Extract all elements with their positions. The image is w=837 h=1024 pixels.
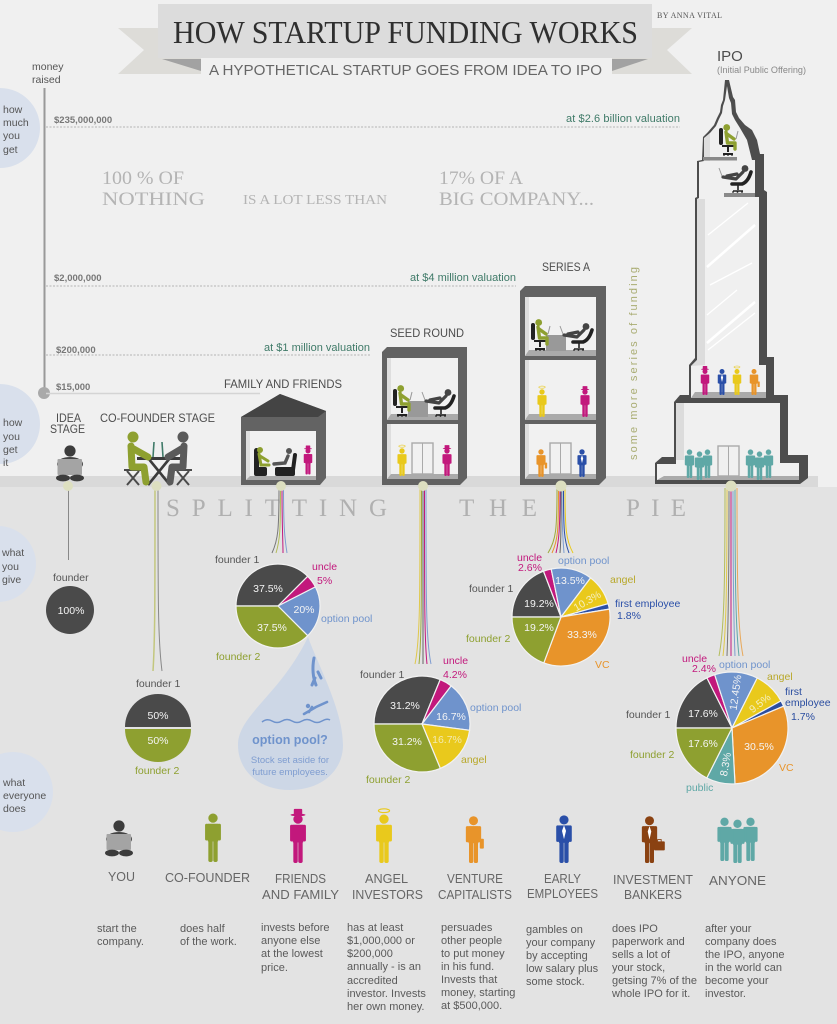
pie: IPO: 2.4% xyxy=(692,663,716,675)
pie: seed round: 16.7% xyxy=(432,734,462,746)
pie: seed round xyxy=(360,655,521,786)
pie: idea stage: founder xyxy=(53,572,89,584)
column: you xyxy=(97,820,144,948)
stage label: seed round: SEED ROUND xyxy=(390,326,464,340)
side bubble: what everyone does xyxy=(0,752,53,832)
column: angel investors: INVESTORS xyxy=(352,887,423,902)
column: early employees: by accepting xyxy=(526,950,588,962)
column: early employees: EMPLOYEES xyxy=(527,886,598,901)
pie: co-founder stage: founder 1 xyxy=(136,678,181,690)
stage label: idea: IDEA xyxy=(56,411,81,425)
pie: IPO: founder 1 xyxy=(626,709,671,721)
pie: IPO: 9.5% xyxy=(747,692,773,716)
column: investment bankers: your stock, xyxy=(612,962,665,974)
pie: series A: angel xyxy=(610,574,636,586)
pie: co-founder stage xyxy=(125,678,191,777)
column: angel investors: $200,000 xyxy=(347,948,393,960)
callout: option pool drop: option pool? xyxy=(252,733,328,747)
pie: IPO: 30.5% xyxy=(744,741,774,753)
column: investment bankers: getsing 7% of the xyxy=(612,975,697,987)
heading: splitting the pie xyxy=(166,495,686,522)
building: seed round xyxy=(382,347,467,485)
column: friends and family: invests before xyxy=(261,922,329,934)
funding level: 2 million: $2,000,000 xyxy=(54,273,102,284)
title: HOW STARTUP FUNDING WORKS xyxy=(173,14,638,50)
stage label: IPO: IPO xyxy=(717,48,743,65)
funding level: 2 million: at $4 million valuation xyxy=(410,272,516,284)
pie: series A: 2.6% xyxy=(518,562,542,574)
connector: idea to founder xyxy=(63,481,73,560)
column: venture capitalists xyxy=(438,816,515,1012)
title banner xyxy=(118,4,692,79)
pie: seed round: option pool xyxy=(470,702,521,714)
slogan text xyxy=(102,168,594,210)
heading: splitting the pie: PIE xyxy=(626,495,686,522)
column: you: company. xyxy=(97,936,144,948)
side bubble: how much you get: much xyxy=(3,117,29,129)
pie: IPO: uncle xyxy=(682,653,707,665)
funding level: 200 thousand: at $1 million valuation xyxy=(264,342,370,354)
connector: IPO xyxy=(719,480,743,656)
side bubble: how much you get: get xyxy=(3,144,18,156)
side bubble: how you get it: it xyxy=(3,457,8,469)
side bubble: what everyone does: what xyxy=(2,777,25,789)
icon: co-founders at table xyxy=(124,432,192,485)
pie: series A: 33.3% xyxy=(567,629,597,641)
callout: option pool drop: Stock set aside for xyxy=(251,755,329,766)
stage label: family and friends: FAMILY AND FRIENDS xyxy=(224,377,342,391)
pie: IPO: 17.6% xyxy=(688,738,718,750)
pie: family and friends: 37.5% xyxy=(253,583,283,595)
column: angel investors: investor. Invests xyxy=(347,988,426,1000)
pie: seed round: founder 1 xyxy=(360,669,405,681)
pie: seed round: uncle xyxy=(443,655,468,667)
column: angel investors xyxy=(347,809,426,1013)
stage label: IPO xyxy=(717,48,806,75)
building: series A xyxy=(520,286,606,485)
column: investment bankers: paperwork and xyxy=(612,936,685,948)
pie: co-founder stage: founder 2 xyxy=(135,765,180,777)
pie: IPO xyxy=(626,653,831,794)
side bubble: how you get it xyxy=(0,384,40,469)
column: venture capitalists: to put money xyxy=(441,948,505,960)
column: investment bankers: sells a lot of xyxy=(612,949,671,961)
pie: co-founder stage: 50% xyxy=(147,735,169,747)
column: early employees: EARLY xyxy=(544,871,581,886)
pie: family and friends: option pool xyxy=(321,613,372,625)
heading: splitting the pie: SPLITTING xyxy=(166,495,387,522)
side bubble: how much you get xyxy=(0,88,40,168)
column: early employees xyxy=(526,815,599,988)
side bubble: what you give: what xyxy=(1,547,24,559)
pie: series A: 13.5% xyxy=(555,575,585,587)
column: venture capitalists: VENTURE xyxy=(447,871,503,886)
pie: family and friends: 5% xyxy=(317,575,332,587)
background: lower panel xyxy=(0,487,837,1024)
pie: seed round: 16.7% xyxy=(436,711,466,723)
slogan text: 17% OF A xyxy=(439,168,523,189)
pie: IPO: 1.7% xyxy=(791,711,815,723)
pie: IPO: employee xyxy=(785,697,831,709)
callout: option pool drop xyxy=(238,637,343,790)
column: you: YOU xyxy=(108,869,135,884)
column: anyone xyxy=(705,818,784,1000)
column: investment bankers: does IPO xyxy=(612,923,658,935)
slogan text: 100 % OF xyxy=(102,168,184,189)
column: early employees: low salary plus xyxy=(526,963,599,975)
funding level: 235 million: at $2.6 billion valuation xyxy=(566,113,680,125)
pie: family and friends: uncle xyxy=(312,561,337,573)
column: friends and family: AND FAMILY xyxy=(262,887,339,902)
stage label: idea: STAGE xyxy=(50,422,85,436)
column: venture capitalists: money, starting xyxy=(441,987,515,999)
funding level: 200 thousand xyxy=(46,342,370,356)
pie: co-founder stage: 50% xyxy=(147,710,169,722)
column: co-founder: of the work. xyxy=(180,936,237,948)
side bubble: how much you get: you xyxy=(3,130,20,142)
column: venture capitalists: persuades xyxy=(441,922,493,934)
pie: series A: option pool xyxy=(558,555,609,567)
column: anyone: in the world can xyxy=(705,962,782,974)
side bubble: what you give xyxy=(0,526,36,602)
column: anyone: become your xyxy=(705,975,769,987)
side bubble: how you get it: get xyxy=(3,444,18,456)
funding level: 235 million: $235,000,000 xyxy=(54,115,112,126)
column: anyone: after your xyxy=(705,923,752,935)
pie: family and friends: 37.5% xyxy=(257,622,287,634)
column: angel investors: has at least xyxy=(347,922,403,934)
building: family house xyxy=(241,394,326,485)
pie: family and friends xyxy=(215,554,372,663)
funding level: 200 thousand: $200,000 xyxy=(56,345,96,356)
axis: money raised xyxy=(32,61,64,399)
byline: BY ANNA VITAL xyxy=(657,11,722,20)
pie: seed round: 31.2% xyxy=(390,700,420,712)
column: you: start the xyxy=(97,923,137,935)
pie: IPO: public xyxy=(686,782,713,794)
heading: splitting the pie: THE xyxy=(459,495,537,522)
column: co-founder xyxy=(165,813,250,948)
background: upper page xyxy=(0,0,837,488)
connector: seed round xyxy=(415,481,431,664)
pie: seed round: 31.2% xyxy=(392,736,422,748)
pie: IPO: 8.3% xyxy=(718,752,734,777)
column: friends and family: FRIENDS xyxy=(275,871,326,886)
column: venture capitalists: in his fund. xyxy=(441,961,494,973)
side bubble: what you give: give xyxy=(2,574,21,586)
stage label: IPO: (Initial Public Offering) xyxy=(717,65,806,75)
pie: IPO: 17.6% xyxy=(688,708,718,720)
pie: family and friends: 20% xyxy=(293,604,315,616)
column: venture capitalists: CAPITALISTS xyxy=(438,887,512,902)
stage label: co-founder: CO-FOUNDER STAGE xyxy=(100,411,215,425)
column: anyone: ANYONE xyxy=(709,873,766,888)
pie: family and friends: founder 2 xyxy=(216,651,261,663)
stage label: idea xyxy=(50,411,85,436)
pie: series A: 19.2% xyxy=(524,598,554,610)
pie: series A: uncle xyxy=(517,552,542,564)
column: friends and family: at the lowest xyxy=(261,948,323,960)
column: friends and family: price. xyxy=(261,962,288,974)
pie: IPO: 12.45% xyxy=(728,674,744,711)
connector: co-founder stage xyxy=(152,481,162,671)
column: angel investors: accredited xyxy=(347,975,398,987)
pie: series A: 10.3% xyxy=(572,589,603,614)
funding level: 2 million xyxy=(46,272,516,286)
column: investment bankers: INVESTMENT xyxy=(613,872,693,887)
slogan text: BIG COMPANY... xyxy=(439,189,594,210)
side bubble: how you get it: how xyxy=(3,417,23,429)
pie: IPO: angel xyxy=(767,671,793,683)
column: co-founder: does half xyxy=(180,923,226,935)
side bubble: how you get it: you xyxy=(3,431,20,443)
side bubble: what everyone does: everyone xyxy=(3,790,46,802)
slogan text: NOTHING xyxy=(102,189,205,210)
column: friends and family xyxy=(261,809,339,974)
column: investment bankers xyxy=(611,816,697,1000)
side bubble: how much you get: how xyxy=(3,104,23,116)
pie: series A: first employee xyxy=(615,598,681,610)
callout: option pool drop: future employees. xyxy=(252,767,328,778)
pie: series A: 1.8% xyxy=(617,610,641,622)
pie: seed round: angel xyxy=(461,754,487,766)
pie: series A xyxy=(466,552,681,671)
column: early employees: gambles on xyxy=(526,924,583,936)
vertical note: some more series of funding: some more series of funding xyxy=(628,267,640,460)
pie: IPO: VC xyxy=(779,762,794,774)
pie: IPO: founder 2 xyxy=(630,749,675,761)
pie: series A: 19.2% xyxy=(524,622,554,634)
column: anyone: company does xyxy=(705,936,777,948)
side bubble: what everyone does: does xyxy=(3,803,26,815)
pie: idea stage: 100% xyxy=(58,605,84,617)
pie: IPO: first xyxy=(785,686,802,698)
pie: series A: founder 1 xyxy=(469,583,514,595)
pie: seed round: founder 2 xyxy=(366,774,411,786)
subtitle: A HYPOTHETICAL STARTUP GOES FROM IDEA TO IPO xyxy=(209,62,602,79)
column: anyone: investor. xyxy=(705,988,746,1000)
connector: family and friends xyxy=(272,481,287,553)
pie: idea stage xyxy=(46,572,94,634)
pie: series A: founder 2 xyxy=(466,633,511,645)
connector: series A xyxy=(548,480,573,553)
column: early employees: your company xyxy=(526,937,596,949)
column: angel investors: ANGEL xyxy=(365,871,408,886)
slogan text: IS A LOT LESS THAN xyxy=(243,193,387,208)
column: friends and family: anyone else xyxy=(261,935,320,947)
pie: IPO: option pool xyxy=(719,659,770,671)
column: angel investors: $1,000,000 or xyxy=(347,935,415,947)
column: investment bankers: BANKERS xyxy=(624,887,682,902)
axis: money raised: money xyxy=(32,61,64,73)
pie: series A: VC xyxy=(595,659,610,671)
column: venture capitalists: at $500,000. xyxy=(441,1000,502,1012)
pie: seed round: 4.2% xyxy=(443,669,467,681)
funding level: 235 million xyxy=(46,113,680,127)
column: angel investors: her own money. xyxy=(347,1001,424,1013)
side bubble: what you give: you xyxy=(2,561,19,573)
building: IPO tower xyxy=(655,80,808,484)
axis: money raised: raised xyxy=(32,74,61,86)
stage label: series A: SERIES A xyxy=(542,260,590,274)
column: investment bankers: whole IPO for it. xyxy=(611,988,690,1000)
icon: idea stage founder xyxy=(56,445,84,481)
column: venture capitalists: other people xyxy=(441,935,502,947)
funding level: 15 thousand: $15,000 xyxy=(56,382,90,393)
column: early employees: some stock. xyxy=(526,976,585,988)
pie: family and friends: founder 1 xyxy=(215,554,260,566)
column: angel investors: annually - is an xyxy=(347,961,421,973)
column: anyone: the IPO, anyone xyxy=(705,949,784,961)
column: co-founder: CO-FOUNDER xyxy=(165,870,250,885)
column: venture capitalists: Invests that xyxy=(441,974,497,986)
ground strip xyxy=(0,476,818,487)
